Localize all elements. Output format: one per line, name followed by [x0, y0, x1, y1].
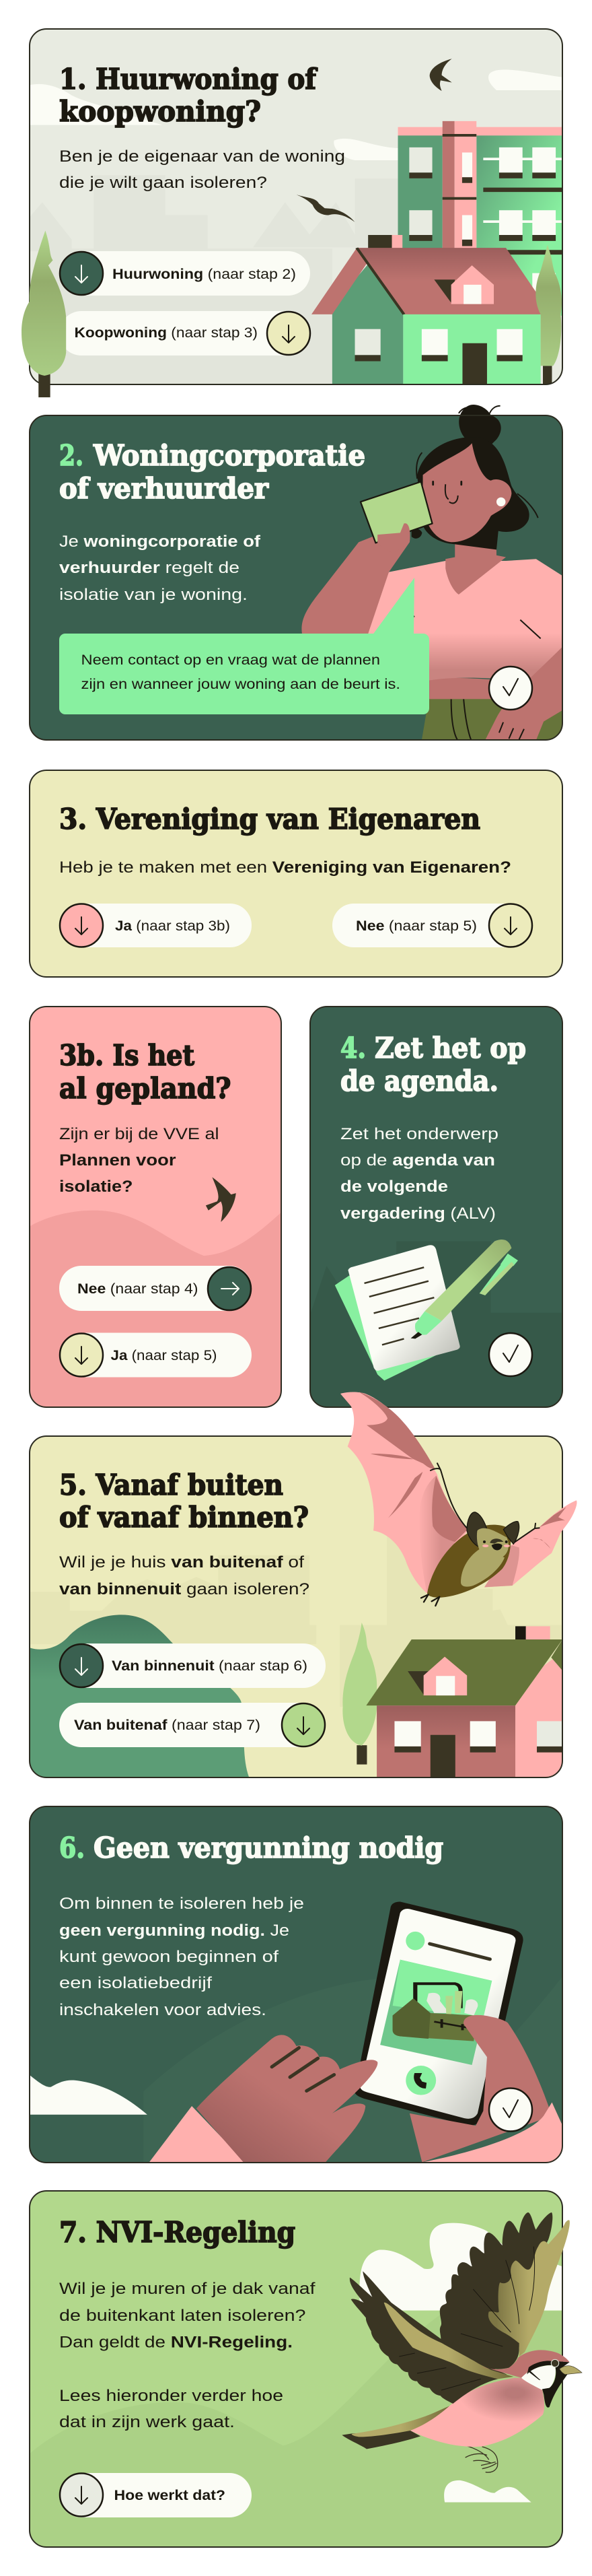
icon: check	[489, 1333, 532, 1376]
title: of verhuurder	[59, 472, 269, 505]
apartment building	[398, 121, 563, 316]
panel background	[30, 415, 562, 740]
body text: Je woningcorporatie of	[59, 533, 261, 551]
callout	[59, 578, 429, 714]
body text: Wil je je muren of je dak vanaf	[59, 2280, 316, 2298]
button: ja: Ja (naar stap 5)	[110, 1348, 217, 1363]
button: hoe werkt dat	[59, 2473, 252, 2517]
body text: op de agenda van	[340, 1151, 495, 1170]
title	[59, 439, 365, 505]
button: ja	[59, 904, 252, 947]
body text: Ben je de eigenaar van de woning	[59, 147, 345, 166]
title: koopwoning?	[59, 95, 261, 128]
body text: Heb je te maken met een Vereniging van Eigenaren?	[59, 858, 511, 877]
button: van buitenaf: Van buitenaf (naar stap 7)	[74, 1718, 260, 1733]
title: 2.	[59, 439, 83, 472]
body text: Dan geldt de NVI-Regeling.	[59, 2334, 293, 2351]
illustration: paper and pen	[335, 1240, 518, 1380]
body text: die je wilt gaan isoleren?	[59, 174, 267, 192]
body text	[59, 2280, 316, 2431]
title: 4.	[340, 1031, 366, 1064]
title: 3. Vereniging van Eigenaren	[59, 803, 480, 836]
icon: swift	[430, 59, 452, 91]
title: Geen vergunning nodig	[94, 1831, 443, 1864]
title	[59, 63, 318, 128]
body text	[59, 1125, 219, 1196]
body text: van binnenuit gaan isoleren?	[59, 1580, 309, 1598]
body text	[59, 1895, 304, 2019]
body text: Zet het onderwerp	[340, 1125, 498, 1143]
card outline	[310, 1007, 562, 1407]
button: ja	[59, 1333, 252, 1378]
body text: dat in zijn werk gaat.	[59, 2413, 235, 2431]
button: nee: Nee (naar stap 4)	[77, 1281, 198, 1297]
body text: isolatie van je woning.	[59, 586, 248, 604]
title: 5. Vanaf buiten	[59, 1468, 283, 1501]
title: 1. Huurwoning of	[59, 63, 318, 96]
card outline	[30, 415, 562, 740]
body text: Zijn er bij de VVE al	[59, 1125, 219, 1143]
button: huurwoning: Huurwoning (naar stap 2)	[112, 267, 296, 282]
card outline	[30, 2191, 562, 2547]
illustration: head and phone of woman	[361, 405, 538, 553]
icon: right tree	[535, 245, 562, 384]
icon: bat silhouette	[297, 195, 355, 222]
panel background	[30, 1806, 562, 2163]
body text: Om binnen te isoleren heb je	[59, 1895, 304, 1913]
body text: inschakelen voor advies.	[59, 2001, 266, 2019]
body text: een isolatiebedrijf	[59, 1974, 212, 1992]
title: Woningcorporatie	[93, 439, 365, 472]
button: koopwoning	[59, 311, 310, 355]
body text	[59, 533, 261, 604]
panel: step 3 vereniging van eigenaren	[30, 770, 562, 977]
card outline	[30, 1806, 562, 2163]
illustration: hills, tree and house	[30, 1615, 562, 1777]
callout: zijn en wanneer jouw woning aan de beurt is.	[81, 677, 400, 692]
body text	[59, 147, 345, 192]
body text: vergadering (ALV)	[340, 1205, 496, 1223]
body text: Plannen voor	[59, 1151, 176, 1170]
hill background	[30, 1211, 281, 1407]
panel background	[30, 2191, 562, 2547]
title	[59, 1468, 309, 1534]
panel background	[30, 29, 562, 384]
body text	[59, 1553, 309, 1598]
button: ja: Ja (naar stap 3b)	[115, 918, 230, 934]
title: of vanaf binnen?	[59, 1501, 309, 1534]
body text: Lees hieronder verder hoe	[59, 2387, 283, 2405]
body text: isolatie?	[59, 1178, 133, 1196]
title: de agenda.	[340, 1064, 498, 1097]
title	[59, 1039, 231, 1105]
title: al gepland?	[59, 1072, 231, 1105]
illustration: city, clouds and houses	[30, 69, 563, 384]
title: 7. NVI-Regeling	[59, 2216, 295, 2249]
body text: verhuurder regelt de	[59, 559, 239, 577]
button: nee	[332, 904, 533, 947]
button: van binnenuit: Van binnenuit (naar stap 6)	[112, 1658, 307, 1674]
button: koopwoning: Koopwoning (naar stap 3)	[74, 325, 258, 341]
panel background	[30, 1436, 562, 1777]
button: hoe werkt dat: Hoe werkt dat?	[114, 2488, 225, 2503]
body text: geen vergunning nodig. Je	[59, 1922, 289, 1940]
panel: step 7 nvi-regeling	[30, 2191, 582, 2549]
panel: step 5 vanaf buiten of binnen	[30, 1392, 577, 1779]
illustration: cloud, hill, phone and hands	[30, 1901, 562, 2163]
body text: de buitenkant laten isoleren?	[59, 2307, 305, 2325]
body text: de volgende	[340, 1178, 448, 1196]
card outline	[30, 1007, 281, 1407]
body text: kunt gewoon beginnen of	[59, 1948, 279, 1966]
panel: step 6 geen vergunning nodig	[30, 1806, 562, 2163]
icon: swift	[206, 1177, 236, 1222]
illustration: bat	[340, 1392, 577, 1606]
icon: check	[489, 667, 532, 710]
illustration: sparrow	[342, 2212, 582, 2472]
skyline background	[310, 1242, 562, 1407]
icon: left tree	[22, 231, 66, 397]
button: nee: Nee (naar stap 5)	[356, 918, 477, 934]
title	[340, 1031, 526, 1097]
button: van buitenaf	[59, 1703, 326, 1747]
card outline	[30, 1436, 562, 1777]
title: Zet het op	[375, 1031, 526, 1064]
panel: step 4 zet het op de agenda	[310, 1007, 562, 1407]
callout: Neem contact op en vraag wat de plannen	[81, 652, 380, 668]
illustration: body of woman on phone	[301, 523, 562, 740]
panel background	[310, 1007, 562, 1407]
body text: Wil je je huis van buitenaf of	[59, 1553, 304, 1571]
card outline	[30, 29, 562, 384]
panel background	[30, 1007, 281, 1407]
body text	[340, 1125, 498, 1223]
button: van binnenuit	[59, 1643, 326, 1688]
panel: step 2 woningcorporatie	[30, 405, 562, 740]
button: nee	[59, 1266, 252, 1311]
panel: step 1 huurwoning of koopwoning	[22, 29, 563, 397]
title: 6.	[59, 1831, 85, 1864]
title: 3b. Is het	[59, 1039, 195, 1072]
button: huurwoning	[59, 251, 310, 296]
panel background	[30, 770, 562, 977]
background clouds and hills	[30, 2223, 563, 2549]
panel: step 3b is het al gepland	[30, 1007, 281, 1407]
icon: check	[489, 2089, 532, 2132]
house	[311, 235, 551, 384]
